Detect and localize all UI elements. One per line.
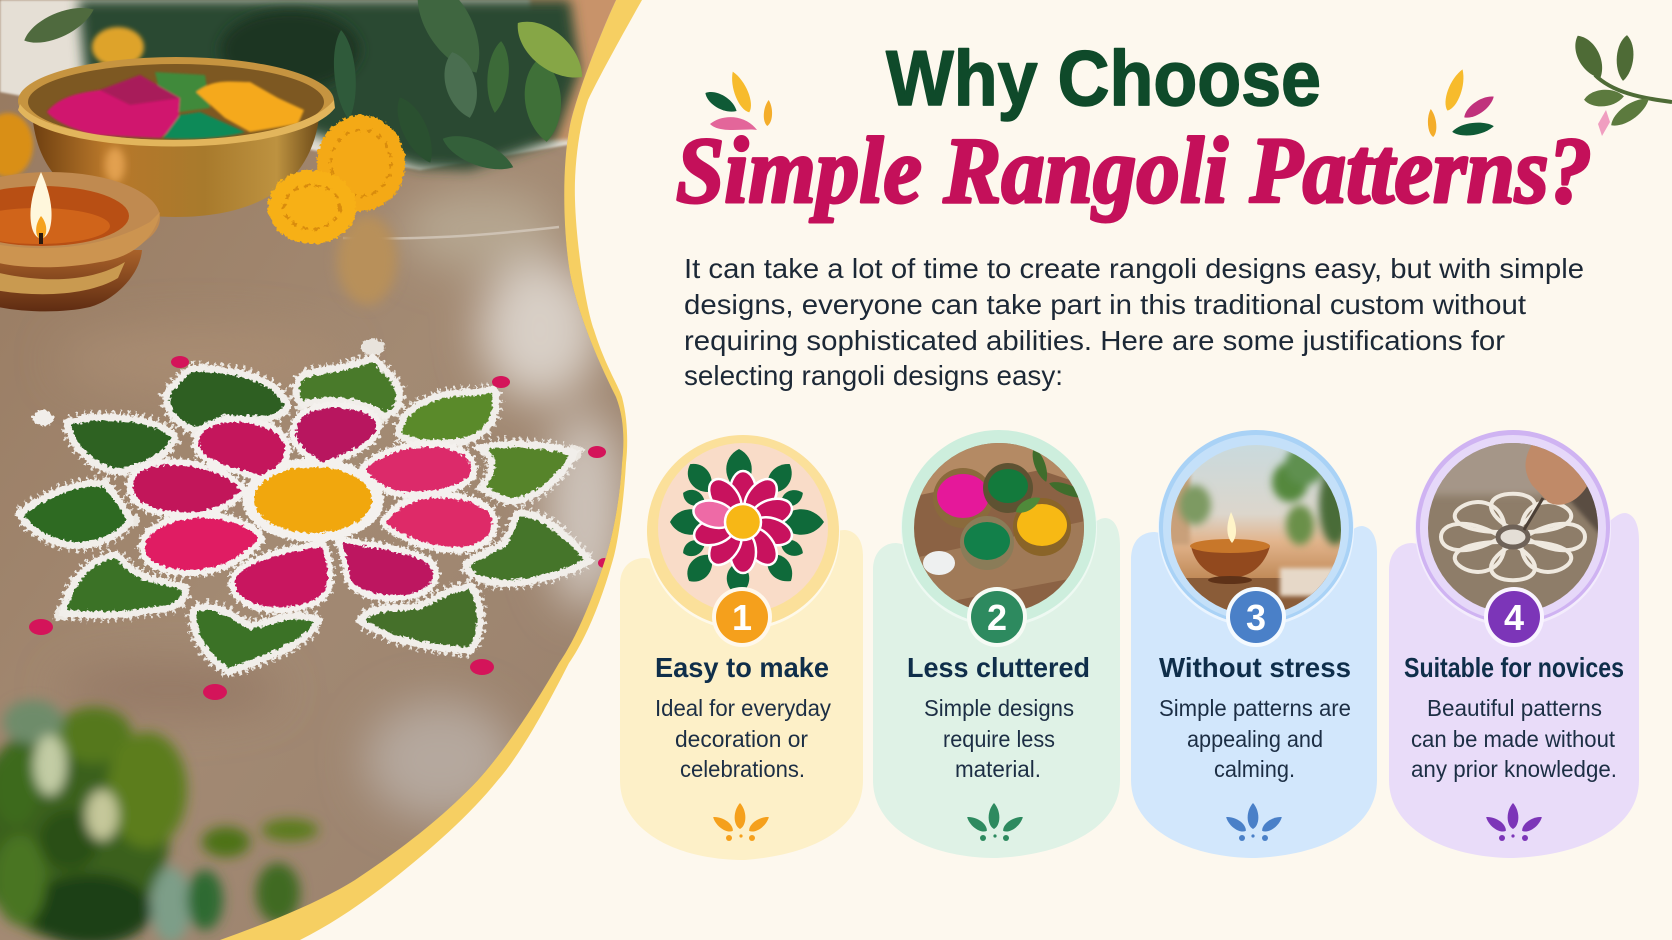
icon: motif	[1224, 803, 1284, 841]
card description	[924, 695, 1074, 782]
image circle: rangoli illustration	[646, 435, 840, 630]
yellow curved border	[0, 0, 642, 940]
card description	[1159, 695, 1351, 782]
card heading: Easy to make	[655, 652, 829, 683]
card heading: Less cluttered	[907, 652, 1090, 683]
card background	[1389, 513, 1639, 858]
marigolds	[268, 115, 405, 244]
rangoli	[24, 339, 610, 700]
icon: motif	[1484, 803, 1544, 841]
pink dots	[29, 356, 610, 700]
number badge 1: 1	[732, 597, 752, 638]
pink petals	[133, 408, 492, 607]
title	[676, 34, 1592, 223]
green leaves	[24, 362, 584, 668]
card description: any prior knowledge.	[1411, 756, 1617, 782]
card description: require less	[943, 726, 1055, 752]
card description: decoration or	[675, 726, 808, 752]
intro paragraph: designs, everyone can take part in this traditional custom without	[684, 289, 1526, 320]
card description: can be made without	[1411, 726, 1615, 752]
card description: Beautiful patterns	[1427, 695, 1602, 721]
number badge 2: 2	[987, 597, 1007, 638]
image circle: diya photo	[1158, 430, 1354, 627]
number badge 3: 3	[1246, 597, 1266, 638]
card background	[873, 518, 1120, 858]
small marigolds background	[92, 27, 144, 67]
marble highlights	[60, 190, 625, 820]
card description: appealing and	[1187, 726, 1323, 752]
card background	[620, 530, 863, 860]
intro paragraph: It can take a lot of time to create rangoli designs easy, but with simple	[684, 253, 1584, 284]
panel: card 4 Suitable for novices	[1389, 430, 1639, 858]
panel: card 2 Less cluttered	[873, 430, 1120, 858]
icon: left colour splash	[702, 69, 773, 130]
number badge 4	[1484, 587, 1544, 647]
intro paragraph	[684, 253, 1584, 391]
photo: rangoli on marble table	[0, 0, 660, 940]
card heading: Without stress	[1159, 652, 1351, 683]
wall and background	[0, 0, 660, 170]
title line: Why Choose: Why Choose	[886, 34, 1321, 122]
intro paragraph: selecting rangoli designs easy:	[684, 360, 1063, 391]
title line: Simple Rangoli Patterns?: Simple Rangoli Patterns?	[676, 119, 1592, 223]
number badge 4: 4	[1504, 597, 1524, 638]
image circle: powder bowls photo	[900, 430, 1100, 627]
white powder outlines	[24, 339, 584, 668]
icon: motif	[711, 803, 771, 841]
card description: material.	[955, 756, 1041, 782]
card description	[655, 695, 831, 782]
brass bowl	[18, 57, 335, 217]
card heading: Suitable for novices	[1404, 652, 1624, 683]
icon: motif	[965, 803, 1025, 841]
card description: Simple patterns are	[1159, 695, 1351, 721]
icon: right colour splash	[1427, 67, 1497, 138]
card description: calming.	[1214, 756, 1295, 782]
number badge 3	[1226, 587, 1286, 647]
card description: Ideal for everyday	[655, 695, 831, 721]
number badge 1	[712, 587, 772, 647]
card description: Simple designs	[924, 695, 1074, 721]
blurred foreground foliage	[0, 700, 318, 940]
foliage top	[19, 0, 594, 178]
powders	[47, 72, 304, 139]
intro paragraph: requiring sophisticated abilities. Here are some justifications for	[684, 325, 1505, 356]
card description	[1411, 695, 1617, 782]
icon: corner branch	[1568, 31, 1672, 136]
card background	[1131, 526, 1377, 858]
card description: celebrations.	[680, 756, 805, 782]
image circle: hand drawing rangoli photo	[1415, 430, 1611, 627]
diya	[0, 172, 160, 311]
number badge 2	[967, 587, 1027, 647]
panel: card 1 Easy to make	[620, 435, 863, 860]
panel: card 3 Without stress	[1131, 430, 1377, 858]
